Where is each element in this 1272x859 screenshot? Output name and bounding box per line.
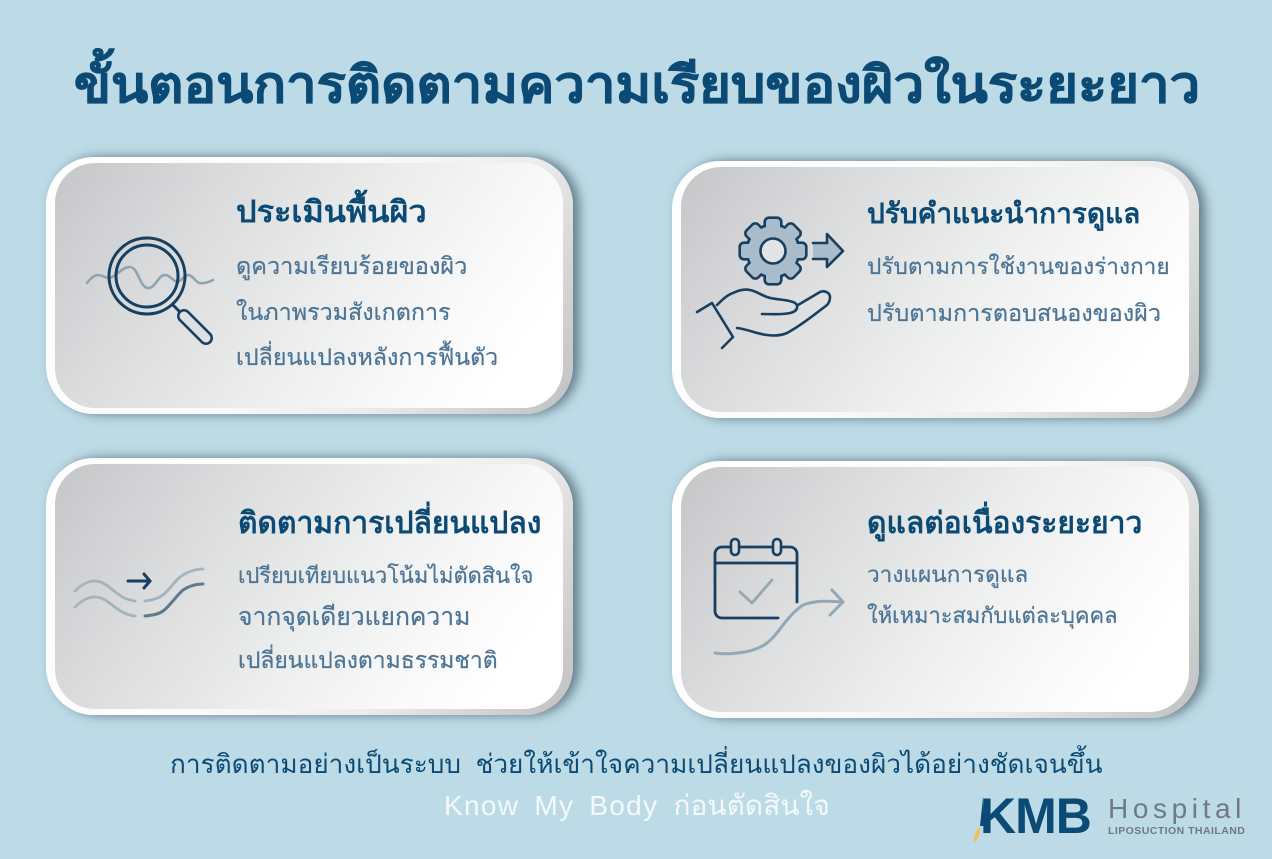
closing statement: การติดตามอย่างเป็นระบบ ช่วยให้เข้าใจความเปลี่ยนแปลงของผิวได้อย่างชัดเจนขึ้น [170,749,1103,779]
text block: ให้เหมาะสมกับแต่ละบุคคล [867,603,1118,628]
icon: logo accent [974,797,984,842]
panel: skin assessment [46,157,573,414]
text block [238,563,533,673]
text block: ดูความเรียบร้อยของผิว [236,253,467,279]
icon: gear, arrow and hand [696,216,844,350]
text block [867,562,1118,629]
text block: ปรับตามการใช้งานของร่างกาย [867,254,1170,279]
heading: ดูแลต่อเนื่องระยะยาว [867,507,1142,540]
icon: calendar and trend arrow [714,538,844,656]
logo: KMB Hospital [974,788,1246,844]
text block [236,253,498,370]
logo wordmark: KMB [980,788,1091,844]
logo subtitle: LIPOSUCTION THAILAND [1108,825,1245,837]
heading: ปรับคำแนะนำการดูแล [867,198,1140,229]
panel: adjust care advice [672,161,1199,418]
icon: waves with arrow [74,568,204,618]
text block: ปรับตามการตอบสนองของผิว [867,300,1161,326]
text block: จากจุดเดียวแยกความ [238,604,470,631]
panel: track changes [46,458,573,715]
title: ขั้นตอนการติดตามความเรียบของผิวในระยะยาว [74,57,1200,113]
icon: magnifier over wave [86,236,214,345]
text block: เปลี่ยนแปลงหลังการฟื้นตัว [236,344,498,370]
logo name: Hospital [1108,793,1246,824]
text block: ในภาพรวมสังเกตการ [236,298,451,324]
text block: วางแผนการดูแล [867,562,1028,587]
heading: ประเมินพื้นผิว [236,196,427,229]
tagline: Know My Body ก่อนตัดสินใจ [444,790,830,821]
heading: ติดตามการเปลี่ยนแปลง [238,507,541,540]
icon: gear [741,219,805,283]
text block: เปรียบเทียบแนวโน้มไม่ตัดสินใจ [238,563,533,588]
text block: เปลี่ยนแปลงตามธรรมชาติ [238,647,498,673]
panel: long-term care [672,461,1199,718]
text block [867,253,1170,326]
